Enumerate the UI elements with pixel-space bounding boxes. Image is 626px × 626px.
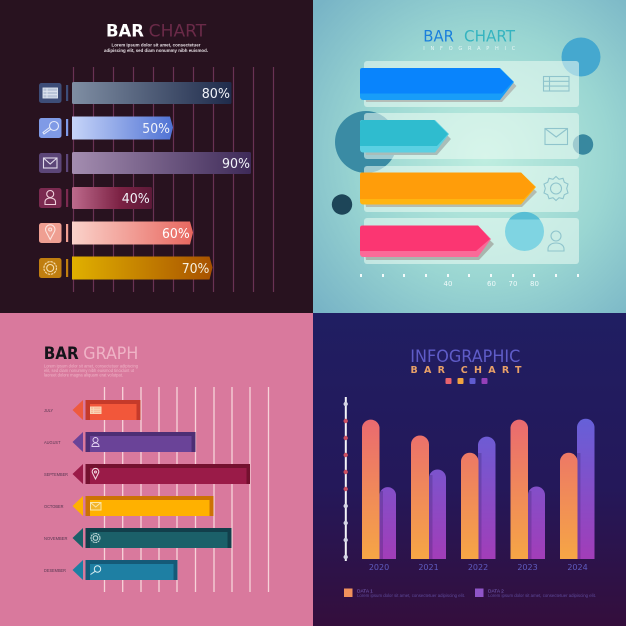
bar: 60%	[72, 222, 193, 244]
bar: teal	[360, 120, 451, 155]
month labels: AUGUST	[44, 440, 61, 446]
axis ticks	[360, 274, 579, 277]
bars: 2023	[510, 420, 545, 559]
heading: bar chart infographic: CHART	[464, 27, 515, 46]
bar: 90%: 90%	[222, 156, 250, 172]
icon: list	[544, 76, 569, 91]
month labels: DESEMBER	[44, 568, 66, 574]
year labels: 2020	[369, 563, 389, 572]
text block: description	[104, 42, 208, 53]
bars: 2021	[411, 436, 446, 559]
bars: 2022	[461, 437, 496, 559]
bar: 40%: 40%	[122, 191, 150, 207]
legend: data 1	[344, 588, 465, 598]
legend dots	[446, 378, 488, 384]
axis labels: 70	[509, 280, 517, 288]
heading: bar chart: CHART	[149, 22, 207, 42]
icon: person	[39, 188, 62, 208]
bar: july	[72, 400, 140, 420]
row panels	[364, 61, 579, 264]
side ticks	[66, 85, 68, 277]
legend: data 2	[475, 588, 596, 598]
decorative circle: above row 4	[505, 212, 544, 251]
heading: bar chart infographic	[423, 27, 516, 52]
bar: october	[72, 496, 214, 516]
year labels: 2021	[418, 563, 439, 572]
panel: pink bar graph	[0, 313, 313, 626]
axis labels: 60	[487, 280, 496, 288]
icon: person	[548, 231, 564, 251]
heading: bar graph	[44, 344, 138, 363]
text block: description: elit, sed diam nonummy nibh euismod tincidunt ut	[44, 368, 135, 373]
axis labels	[444, 280, 539, 288]
legend: data 2: Lorem ipsum dolor sit amet, consectetuer adipiscing elit.	[488, 593, 596, 598]
icon: pin	[39, 223, 62, 243]
bar: 80%: 80%	[202, 86, 230, 102]
heading: bar graph: GRAPH	[83, 344, 138, 363]
month labels	[44, 408, 68, 574]
month labels: OCTOBER	[44, 504, 64, 510]
bar: 50%	[72, 116, 173, 140]
heading: bar graph: BAR	[44, 344, 79, 363]
text block: description: laoreet dolore magna aliquam erat volutpat.	[44, 372, 123, 378]
text block: description: adipiscing elit, sed diam nonummy nibh euismod.	[104, 48, 208, 53]
heading: bar chart: BAR	[106, 22, 144, 42]
bar: 40%	[72, 187, 152, 209]
heading: bar chart infographic: BAR	[423, 27, 454, 46]
axis labels: 80	[530, 280, 539, 288]
decorative circle: left dark	[332, 194, 352, 215]
bar: orange	[360, 172, 537, 207]
bar: 70%: 70%	[182, 261, 210, 277]
icon: envelope	[39, 153, 62, 173]
heading: bar chart infographic: INFOGRAPHIC	[423, 46, 516, 52]
bar: 70%	[72, 256, 212, 280]
month labels: NOVEMBER	[44, 536, 68, 542]
bar: december	[72, 560, 178, 580]
vertical axis	[344, 397, 348, 561]
panel: navy bar chart	[313, 313, 626, 626]
text block: description	[44, 364, 139, 378]
heading: infographic: INFOGRAPHIC	[410, 346, 520, 366]
bar: november	[72, 528, 232, 548]
icon: gear	[39, 258, 62, 278]
text block: description: Lorem ipsum dolor sit amet, consectetuer adipiscing	[44, 364, 139, 368]
decorative circle: top right	[562, 38, 600, 76]
year labels: 2024	[567, 563, 588, 572]
month labels: JULY	[44, 408, 54, 414]
legend: data 1: Lorem ipsum dolor sit amet, consectetuer adipiscing elit.	[357, 593, 465, 598]
panel: teal bar chart	[313, 0, 626, 313]
icon: list	[39, 83, 62, 103]
bars: 2020	[362, 420, 396, 559]
icon: gear	[544, 176, 568, 200]
decorative circle: large dark behind row 2	[335, 111, 397, 173]
bars: 2024	[560, 419, 594, 559]
legend: data 1: DATA 1	[357, 588, 373, 594]
year labels	[369, 563, 588, 572]
legend: data 2: DATA 2	[488, 588, 504, 594]
bar: 90%	[72, 152, 251, 174]
heading: bar chart	[106, 22, 207, 42]
bar: august	[72, 432, 196, 452]
panel: dark bar chart	[0, 0, 313, 313]
icon: envelope	[545, 128, 568, 144]
year labels: 2023	[517, 563, 538, 572]
month labels: SEPTEMBER	[44, 472, 68, 478]
text block: description: Lorem ipsum dolor sit amet, consectetuer	[112, 42, 201, 48]
bar: pink	[360, 226, 494, 260]
axis labels: 40	[444, 280, 452, 288]
bar: 50%: 50%	[142, 121, 170, 137]
bar: blue	[360, 68, 516, 102]
subheading: bar chart: BAR CHART	[410, 365, 522, 376]
bar: september	[72, 464, 250, 484]
bar: 60%: 60%	[162, 226, 190, 242]
icon: magnifier	[39, 118, 62, 138]
decorative circle: right small	[573, 134, 593, 155]
year labels: 2022	[468, 563, 488, 572]
bar: 80%	[72, 82, 232, 104]
